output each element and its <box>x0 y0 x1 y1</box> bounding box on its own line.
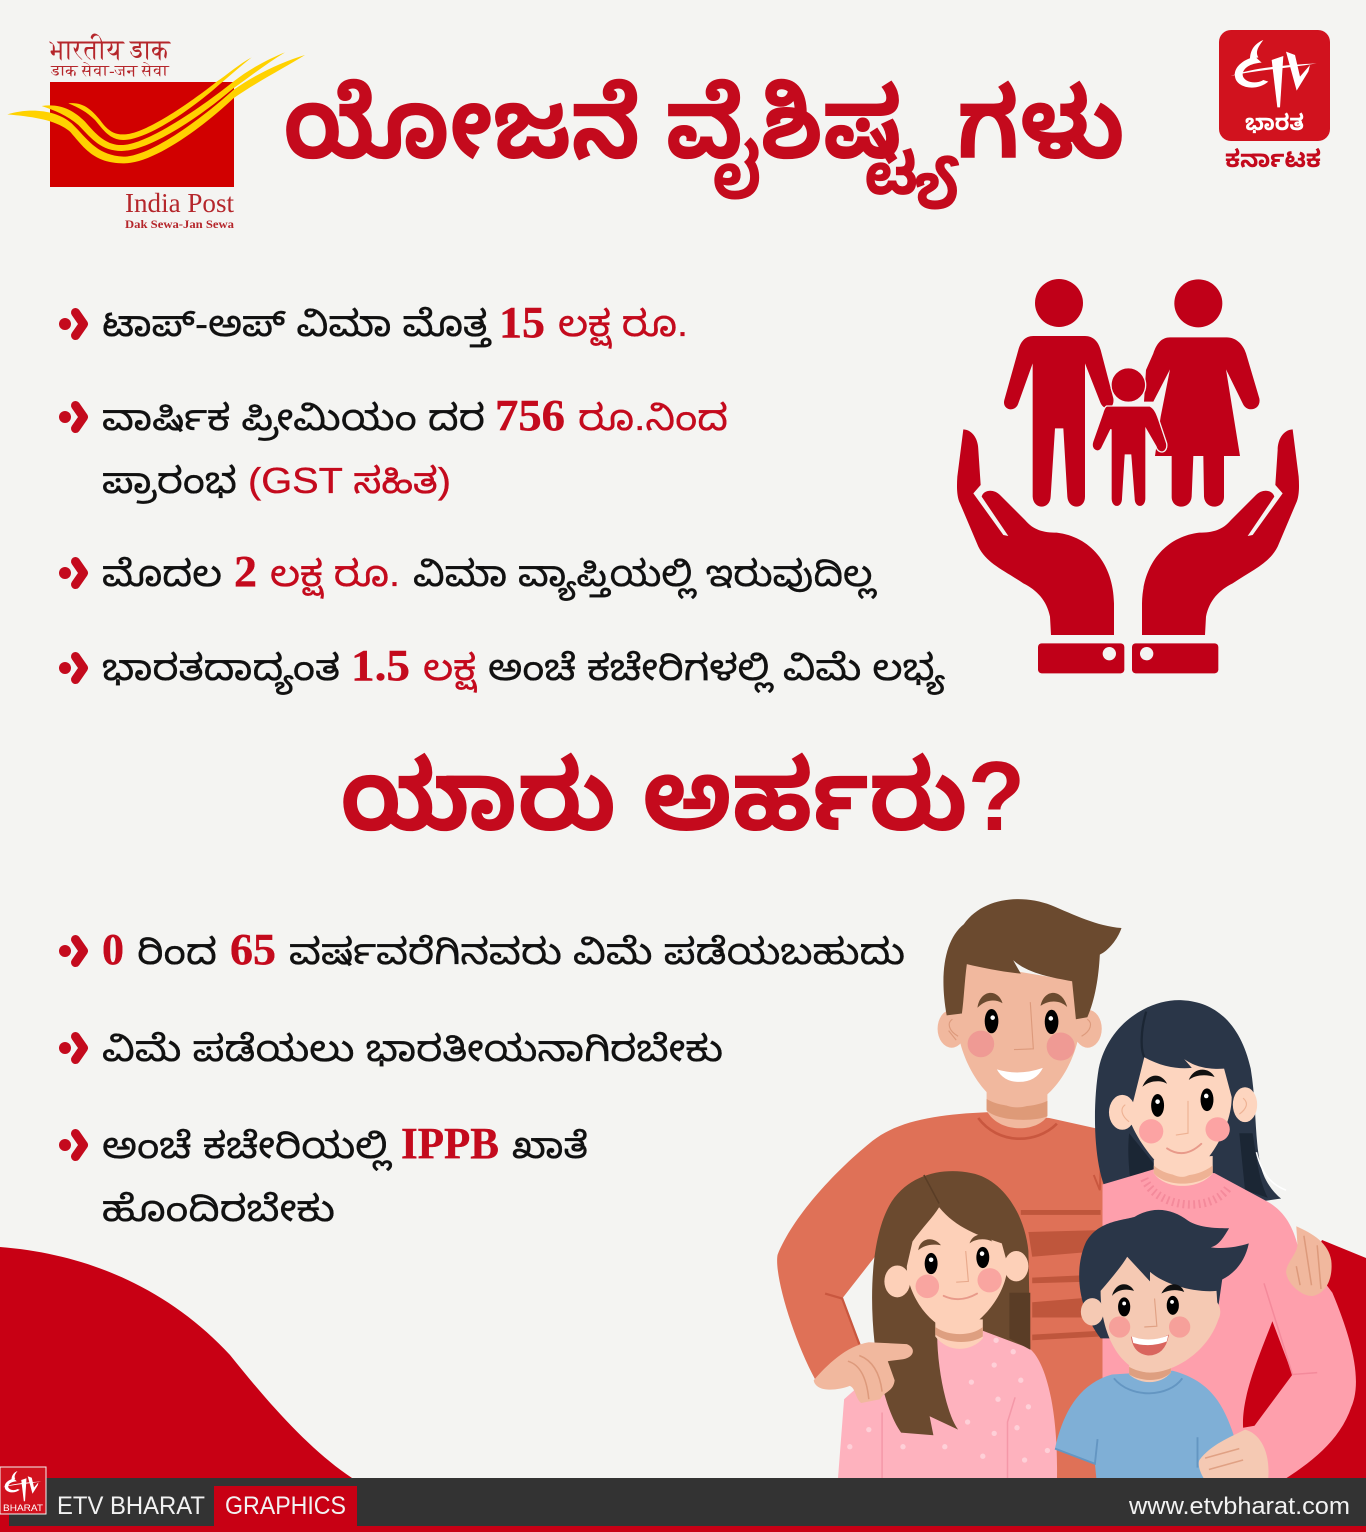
footer GRAPHICS tag <box>214 1486 357 1526</box>
bullet 2: 756 <box>495 391 565 440</box>
right cuff <box>1132 643 1218 673</box>
mother figure <box>1144 279 1260 507</box>
bullet 3 <box>59 547 877 601</box>
footer red strip <box>0 1526 1366 1532</box>
India Post Hindi wordmark: भारतीय डाक <box>48 33 171 66</box>
bullet 4: ಲಕ್ಷ <box>423 647 477 693</box>
left cuff <box>1038 643 1124 673</box>
son <box>1055 1210 1249 1483</box>
Karnataka label: ಕರ್ನಾಟಕ <box>1225 146 1321 173</box>
India Post Hindi tagline: डाक सेवा-जन सेवा <box>50 62 171 80</box>
eligibility bullet 3 <box>59 1119 588 1229</box>
father's hand on mother's shoulder <box>1286 1226 1332 1296</box>
footer GRAPHICS tag: GRAPHICS <box>225 1492 346 1520</box>
eligibility bullet 3: ಅಂಚೆ ಕಚೇರಿಯಲ್ಲಿ <box>102 1125 392 1171</box>
bullet 4: 1.5 <box>351 641 410 690</box>
child figure <box>1092 368 1167 507</box>
footer dark band <box>9 1478 1366 1526</box>
background red wave bottom-left <box>0 1247 352 1532</box>
ETV logo tile <box>1219 30 1330 141</box>
bullet 1: ಟಾಪ್-ಅಪ್ ವಿಮಾ ಮೊತ್ತ <box>102 303 492 348</box>
eligibility bullet 1 <box>59 925 905 974</box>
India Post envelope <box>50 82 234 187</box>
bullet 1: 15 <box>499 298 545 347</box>
footer website: www.etvbharat.com <box>1128 1493 1350 1520</box>
footer bar <box>0 1467 1366 1532</box>
eligibility bullet 2: ವಿಮೆ ಪಡೆಯಲು ಭಾರತೀಯನಾಗಿರಬೇಕು <box>102 1028 723 1069</box>
bullet list: eligibility <box>59 925 905 1229</box>
India Post tagline: Dak Sewa-Jan Sewa <box>125 219 234 231</box>
bullet 3: ಲಕ್ಷ ರೂ. <box>270 553 400 599</box>
Bharat label on tile: ಭಾರತ <box>1245 110 1304 135</box>
title: scheme features: ಯೋಜನೆ ವೈಶಿಷ್ಟ್ಯಗಳು <box>283 69 1125 210</box>
eligibility bullet 3: IPPB <box>401 1119 499 1168</box>
bullet 3: 2 <box>234 547 257 596</box>
icon: family in caring hands <box>957 279 1299 673</box>
bullet 2: (GST ಸಹಿತ) <box>248 460 451 501</box>
eligibility bullet 3: ಖಾತೆ <box>512 1125 588 1166</box>
logo: India Post <box>7 33 305 231</box>
left hand <box>957 429 1114 635</box>
bullet 2: ಪ್ರಾರಂಭ <box>102 460 237 504</box>
father <box>777 899 1122 1483</box>
bullet 2 <box>59 391 728 504</box>
footer ETV BHARAT label: ETV BHARAT <box>57 1492 205 1520</box>
logo: ETV Bharat Karnataka <box>1219 30 1330 173</box>
right hand <box>1142 429 1299 635</box>
India Post wordmark: India Post <box>125 188 234 218</box>
bullet 3: ವಿಮಾ ವ್ಯಾಪ್ತಿಯಲ್ಲಿ ಇರುವುದಿಲ್ಲ <box>413 553 877 601</box>
bullet list: features <box>59 298 946 695</box>
footer ETV logo <box>0 1467 46 1514</box>
bullet 1 <box>59 298 688 349</box>
India Post yellow swoosh <box>7 52 305 163</box>
bullet 4: ಅಂಚೆ ಕಚೇರಿಗಳಲ್ಲಿ ವಿಮೆ ಲಭ್ಯ <box>488 647 946 695</box>
daughter <box>838 1171 1057 1483</box>
bullet 3: ಮೊದಲ <box>102 553 222 594</box>
footer ETV logo: BHARAT <box>3 1503 44 1513</box>
bullet 1: ಲಕ್ಷ ರೂ. <box>558 303 688 349</box>
ETV logo glyph <box>1231 40 1317 107</box>
bullet 4 <box>59 641 946 695</box>
heading: who is eligible: ಯಾರು ಅರ್ಹರು? <box>340 741 1025 851</box>
eligibility bullet 1: 65 <box>230 925 276 974</box>
mother's hand on son's shoulder <box>1199 1430 1269 1483</box>
bullet 2: ವಾರ್ಷಿಕ ಪ್ರೀಮಿಯಂ ದರ <box>102 397 485 441</box>
bullet 2: ರೂ.ನಿಂದ <box>578 397 728 438</box>
eligibility bullet 1: ವರ್ಷವರೆಗಿನವರು ವಿಮೆ ಪಡೆಯಬಹುದು <box>289 931 905 972</box>
eligibility bullet 1: ರಿಂದ <box>137 931 217 972</box>
father figure <box>1004 279 1113 507</box>
father's hand on daughter's shoulder <box>814 1342 913 1403</box>
bullet 4: ಭಾರತದಾದ್ಯಂತ <box>102 647 340 695</box>
illustration: family of four <box>777 899 1356 1483</box>
eligibility bullet 3: ಹೊಂದಿರಬೇಕು <box>102 1188 335 1229</box>
eligibility bullet 1: 0 <box>102 925 124 974</box>
mother <box>1095 1000 1356 1483</box>
background red wave bottom-right <box>1240 1240 1366 1532</box>
